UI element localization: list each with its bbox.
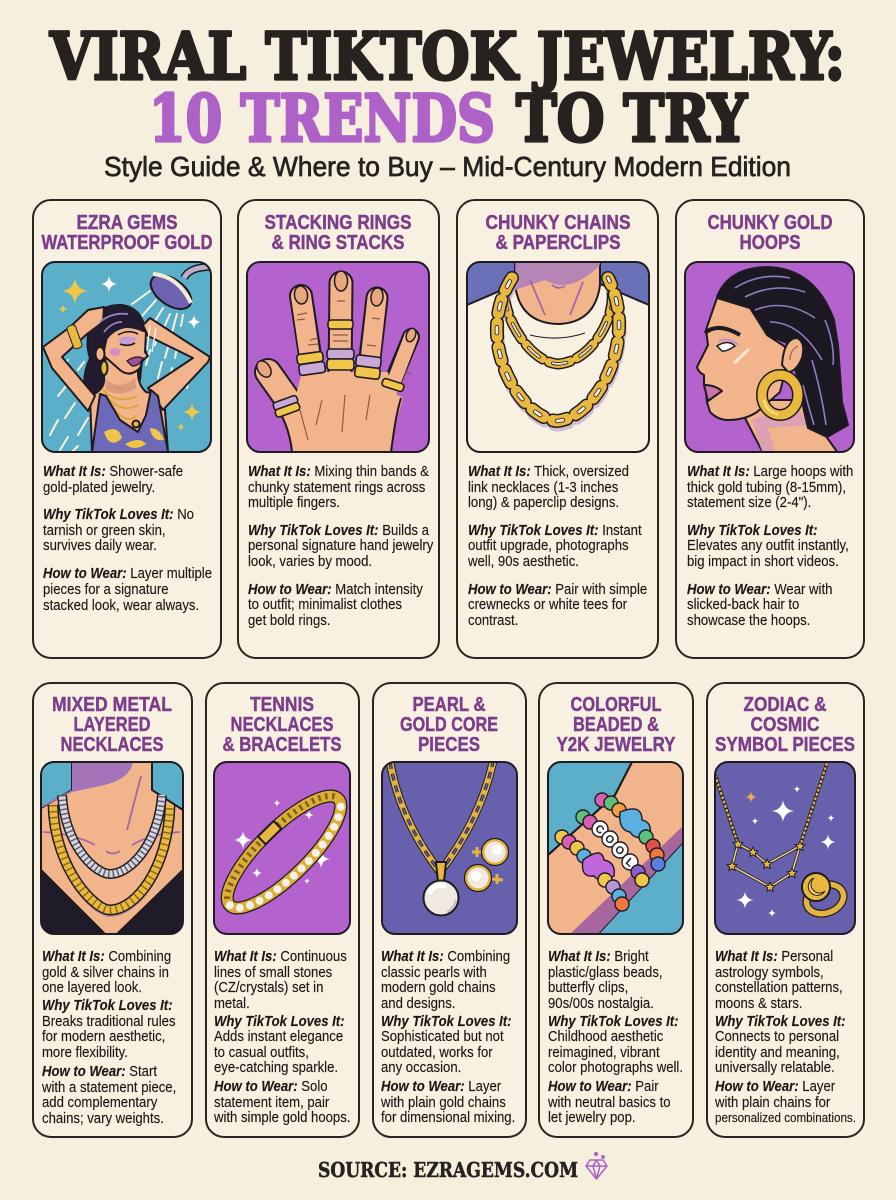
- illustration: beaded bracelets on wrist: O: [602, 832, 617, 847]
- text: what, why, how: Why TikTok Loves It:: [687, 521, 818, 538]
- heading: tennis: & BRACELETS: [222, 733, 342, 756]
- text: what, why, how: How to Wear: Layer: [381, 1077, 501, 1094]
- heading: colorful beaded: COLORFUL: [570, 693, 662, 716]
- heading: zodiac: COSMIC: [750, 713, 820, 736]
- panel: chunky chains: [457, 200, 658, 658]
- text: what, why, how: statement item, pair: [214, 1093, 330, 1110]
- heading: colorful beaded: BEADED &: [573, 713, 659, 736]
- text: what, why, how: What It Is: Shower-safe: [43, 462, 183, 479]
- heading: chunky gold hoops: [708, 211, 832, 254]
- text: what, why, how: contrast.: [468, 611, 518, 628]
- text: what, why, how: [547, 947, 683, 1125]
- text: what, why, how: How to Wear: Pair with simple: [468, 580, 647, 597]
- heading: mixed metal: MIXED METAL: [52, 693, 172, 716]
- text: what, why, how: How to Wear: Layer multiple: [43, 564, 212, 581]
- text: what, why, how: What It Is: Continuous: [214, 947, 347, 964]
- heading: chunky gold hoops: HOOPS: [740, 231, 800, 254]
- illustration: pearl pendant and earrings: [382, 762, 517, 934]
- text: what, why, how: with neutral basics to: [547, 1093, 671, 1110]
- hair: [717, 267, 848, 437]
- illustration: hand with stacked rings: [247, 262, 429, 452]
- text: what, why, how: any occasion.: [381, 1058, 461, 1075]
- illustration: beaded bracelets on wrist: C: [592, 823, 606, 837]
- heading: pearl: PIECES: [418, 733, 480, 756]
- text: what, why, how: What It Is: Bright: [548, 947, 649, 964]
- illustration: woman in shower wearing gold: [42, 262, 215, 452]
- text: what, why, how: to outfit; minimalist clothes: [248, 595, 402, 612]
- text: what, why, how: add complementary: [42, 1093, 157, 1110]
- heading: tennis: NECKLACES: [230, 713, 334, 736]
- heading: zodiac: SYMBOL PIECES: [715, 733, 855, 756]
- text: what, why, how: reimagined, vibrant: [548, 1043, 660, 1060]
- text: what, why, how: outdated, works for: [381, 1043, 493, 1060]
- face: [103, 327, 148, 374]
- text: what, why, how: chains; vary weights.: [42, 1109, 164, 1126]
- text: what, why, how: [213, 947, 350, 1125]
- text: what, why, how: classic pearls with: [381, 963, 487, 980]
- text: what, why, how: Why TikTok Loves It: Instant: [468, 521, 642, 538]
- text: what, why, how: well, 90s aesthetic.: [467, 552, 579, 569]
- text: what, why, how: What It Is: Large hoops with: [687, 462, 853, 479]
- text: what, why, how: How to Wear: Match intensity: [248, 580, 423, 597]
- text: what, why, how: link necklaces (1-3 inches: [468, 478, 618, 495]
- text: what, why, how: eye-catching sparkle.: [214, 1058, 338, 1075]
- text: what, why, how: What It Is: Combining: [42, 947, 171, 964]
- text: what, why, how: What It Is: Mixing thin bands &: [248, 462, 430, 479]
- text: what, why, how: How to Wear: Start: [42, 1062, 157, 1079]
- text: what, why, how: big impact in short videos.: [687, 552, 839, 569]
- text: what, why, how: Connects to personal: [715, 1027, 839, 1044]
- text: what, why, how: Why TikTok Loves It: No: [43, 505, 194, 522]
- text: what, why, how: [714, 947, 856, 1125]
- text: what, why, how: [467, 462, 647, 628]
- heading: mixed metal: [52, 693, 172, 756]
- title: 10 TRENDS: [149, 81, 495, 157]
- heading: mixed metal: LAYERED: [74, 713, 150, 736]
- text: what, why, how: for modern aesthetic,: [42, 1027, 165, 1044]
- neck: [745, 400, 838, 453]
- text: what, why, how: What It Is: Thick, oversized: [468, 462, 629, 479]
- text: what, why, how: What It Is: Personal: [715, 947, 833, 964]
- text: what, why, how: long) & paperclip designs.: [468, 493, 619, 510]
- title: [49, 19, 845, 157]
- text: what, why, how: outfit upgrade, photographs: [468, 536, 629, 553]
- text: what, why, how: tarnish or green skin,: [43, 521, 166, 538]
- illustration: mixed metal chains on neckline: [41, 762, 183, 934]
- subtitle: Style Guide & Where to Buy – Mid-Century Modern Edition: [104, 151, 791, 182]
- text: what, why, how: color photographs well.: [548, 1058, 683, 1075]
- text: what, why, how: metal.: [214, 994, 250, 1011]
- text: what, why, how: Elevates any outfit instantly,: [687, 536, 849, 553]
- text: what, why, how: [41, 947, 176, 1126]
- text: what, why, how: with simple gold hoops.: [213, 1108, 350, 1125]
- text: what, why, how: to casual outfits,: [214, 1043, 309, 1060]
- text: what, why, how: showcase the hoops.: [687, 611, 810, 628]
- text: what, why, how: for dimensional mixing.: [381, 1108, 515, 1125]
- panel: Ezra Gems waterproof gold: [33, 200, 221, 658]
- right arm: [143, 318, 210, 410]
- heading: Ezra Gems: WATERPROOF GOLD: [42, 231, 212, 254]
- text: what, why, how: Why TikTok Loves It: Builds a: [248, 521, 429, 538]
- text: what, why, how: thick gold tubing (8-15mm),: [687, 478, 846, 495]
- heading: stacking rings: [264, 211, 412, 254]
- heading: pearl: PEARL &: [412, 693, 486, 716]
- text: what, why, how: butterfly clips,: [548, 978, 628, 995]
- text: what, why, how: gold & silver chains in: [42, 963, 169, 980]
- text: what, why, how: Childhood aesthetic: [548, 1027, 663, 1044]
- illustration: beaded bracelets on wrist: [548, 762, 683, 934]
- heading: mixed metal: NECKLACES: [60, 733, 164, 756]
- heading: colorful beaded: [556, 693, 676, 756]
- heading: chunky gold hoops: CHUNKY GOLD: [708, 211, 832, 234]
- face: [697, 298, 790, 420]
- source footer: SOURCE: EZRAGEMS.COM: [318, 1158, 578, 1182]
- text: what, why, how: Why TikTok Loves It:: [715, 1012, 846, 1029]
- illustration: profile with gold hoop: [685, 262, 854, 453]
- heading: tennis: [222, 693, 342, 756]
- panel: colorful beaded and Y2K jewelry: [539, 683, 693, 1137]
- hair back: [84, 305, 145, 394]
- text: what, why, how: stacked look, wear always.: [43, 596, 199, 613]
- text: what, why, how: with plain gold chains: [380, 1093, 506, 1110]
- illustration: tennis bracelet: [213, 762, 355, 934]
- text: what, why, how: identity and meaning,: [715, 1043, 840, 1060]
- text: what, why, how: (CZ/crystals) set in: [214, 978, 323, 995]
- text: what, why, how: Why TikTok Loves It:: [381, 1012, 512, 1029]
- icon: gem: [586, 1153, 607, 1179]
- illustration: beaded bracelets on wrist: L: [623, 856, 636, 870]
- heading: tennis: TENNIS: [250, 693, 314, 716]
- heading: Ezra Gems: EZRA GEMS: [76, 211, 178, 234]
- illustration: beaded bracelets on wrist: O: [612, 843, 627, 858]
- text: what, why, how: Why TikTok Loves It:: [214, 1012, 345, 1029]
- text: what, why, how: Sophisticated but not: [381, 1027, 504, 1044]
- text: what, why, how: multiple fingers.: [248, 493, 340, 510]
- heading: chunky chains: CHUNKY CHAINS: [486, 211, 630, 234]
- heading: chunky chains: [486, 211, 630, 254]
- text: what, why, how: [687, 462, 853, 628]
- panel: chunky gold hoops: [676, 200, 864, 658]
- text: what, why, how: plastic/glass beads,: [548, 963, 663, 980]
- text: what, why, how: Why TikTok Loves It:: [548, 1012, 679, 1029]
- heading: zodiac: [715, 693, 855, 756]
- text: what, why, how: [248, 462, 433, 628]
- text: what, why, how: with a statement piece,: [41, 1078, 176, 1095]
- heading: chunky chains: & PAPERCLIPS: [496, 231, 620, 254]
- heading: zodiac: ZODIAC &: [744, 693, 827, 716]
- text: what, why, how: look, varies by mood.: [248, 552, 372, 569]
- text: what, why, how: 90s/00s nostalgia.: [548, 994, 654, 1011]
- panel: pearl and gold core pieces: [373, 683, 526, 1137]
- heading: pearl: [400, 693, 498, 756]
- panel: tennis necklaces and bracelets: [206, 683, 359, 1137]
- text: what, why, how: universally relatable.: [715, 1058, 835, 1075]
- text: what, why, how: Breaks traditional rules: [42, 1012, 176, 1029]
- text: what, why, how: slicked-back hair to: [687, 595, 800, 612]
- text: what, why, how: statement size (2-4").: [687, 493, 811, 510]
- text: what, why, how: Adds instant elegance: [214, 1027, 343, 1044]
- text: what, why, how: lines of small stones: [214, 963, 332, 980]
- text: what, why, how: How to Wear: Layer: [715, 1077, 835, 1094]
- text: what, why, how: modern gold chains: [381, 978, 496, 995]
- text: what, why, how: moons & stars.: [715, 994, 803, 1011]
- text: what, why, how: How to Wear: Pair: [548, 1077, 659, 1094]
- left arm: [43, 307, 104, 411]
- text: what, why, how: and designs.: [381, 994, 455, 1011]
- text: what, why, how: crewnecks or white tees for: [468, 595, 627, 612]
- illustration: chunky chain necklaces: [467, 262, 649, 452]
- heading: pearl: GOLD CORE: [400, 713, 498, 736]
- text: what, why, how: get bold rings.: [248, 611, 330, 628]
- text: what, why, how: constellation patterns,: [715, 978, 843, 995]
- text: what, why, how: pieces for a signature: [43, 580, 169, 597]
- panel: stacking rings: [238, 200, 439, 658]
- text: what, why, how: [43, 462, 212, 613]
- text: what, why, how: gold-plated jewelry.: [43, 478, 155, 495]
- text: what, why, how: survives daily wear.: [43, 536, 157, 553]
- text: what, why, how: with plain chains for: [714, 1093, 831, 1110]
- bikini top: [92, 390, 168, 452]
- text: what, why, how: What It Is: Combining: [381, 947, 510, 964]
- heading: stacking rings: & RING STACKS: [272, 231, 404, 254]
- text: what, why, how: personalized combinations.: [715, 1110, 856, 1125]
- text: what, why, how: How to Wear: Wear with: [687, 580, 832, 597]
- text: what, why, how: astrology symbols,: [715, 963, 824, 980]
- text: what, why, how: chunky statement rings across: [248, 478, 425, 495]
- heading: Ezra Gems: [42, 211, 212, 254]
- panel: mixed metal layered necklaces: [33, 683, 192, 1137]
- text: what, why, how: let jewelry pop.: [548, 1108, 636, 1125]
- text: what, why, how: [380, 947, 515, 1125]
- text: what, why, how: Why TikTok Loves It:: [42, 996, 173, 1013]
- heading: colorful beaded: Y2K JEWELRY: [556, 733, 676, 756]
- illustration: constellation necklace and moon ring: [715, 762, 855, 934]
- panel: zodiac and cosmic symbol pieces: [707, 683, 864, 1137]
- heading: stacking rings: STACKING RINGS: [264, 211, 412, 234]
- text: what, why, how: one layered look.: [42, 978, 142, 995]
- text: what, why, how: How to Wear: Solo: [214, 1077, 328, 1094]
- text: what, why, how: more flexibility.: [42, 1043, 128, 1060]
- text: what, why, how: personal signature hand jewelry: [248, 536, 433, 553]
- title: TO TRY: [516, 81, 747, 157]
